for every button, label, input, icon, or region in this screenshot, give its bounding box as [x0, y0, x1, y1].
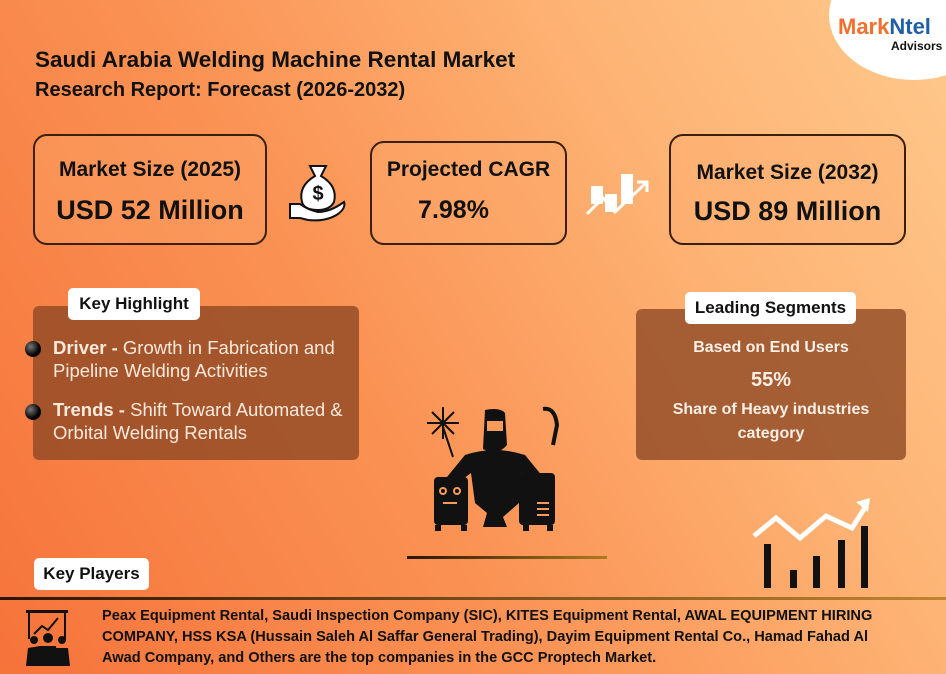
- tag: key highlight: [68, 288, 200, 320]
- icon: welder: [427, 406, 559, 531]
- panel: leading segments: [636, 309, 906, 460]
- icon: money bag: [289, 165, 346, 222]
- panel: leading segments: Based on End Users Share of Heavy industries: [673, 339, 869, 418]
- panel: key highlight: Trends - Shift Toward Automated & Orbital Welding Rentals: [53, 399, 343, 443]
- tag: key players: Key Players: [43, 564, 140, 583]
- panel: leading segments: category: [738, 425, 804, 442]
- panel: key highlight: [33, 306, 359, 460]
- box: CAGR: Projected CAGR: [387, 158, 550, 181]
- icon: money bag: $: [312, 183, 324, 205]
- box: market size 2025: USD 52 Million: [56, 195, 244, 225]
- box: market size 2032: Market Size (2032): [696, 161, 879, 184]
- box: market size 2032: USD 89 Million: [694, 196, 881, 226]
- logo: Advisors: [891, 39, 942, 53]
- icon: players: [26, 610, 70, 666]
- bullets: [25, 341, 41, 357]
- title: [35, 47, 515, 101]
- divider line: [0, 597, 946, 600]
- box: market size 2032: [669, 134, 906, 245]
- title: Saudi Arabia Welding Machine Rental Market: [35, 47, 515, 72]
- divider under welder: [407, 556, 607, 559]
- tag: leading segments: [685, 292, 856, 324]
- box: CAGR: [370, 141, 567, 245]
- box: market size 2025: Market Size (2025): [59, 158, 241, 181]
- tag: leading segments: Leading Segments: [695, 298, 846, 317]
- panel: leading segments: 55%: [751, 369, 791, 391]
- panel: key highlight: Driver - Growth in Fabrication and Pipeline Welding Activities: [53, 337, 335, 381]
- icon: growth: [586, 174, 648, 215]
- text: key players list: Peax Equipment Rental, Saudi Inspection Company (SIC), KITES Equipment Rental, AWAL EQUIPMENT HIRING COMPANY, HSS KSA (Hussain Saleh Al Saffar General Trading), Dayim Equipment Rental Co., Hamad Fahad Al Awad Company, and Others are the top companies in the GCC Proptech Market.: [102, 608, 872, 666]
- title: Research Report: Forecast (2026-2032): [35, 79, 405, 101]
- logo: MarkNtel: [838, 14, 931, 39]
- logo: [829, 0, 946, 80]
- tag: key highlight: Key Highlight: [79, 294, 189, 313]
- box: market size 2025: [33, 134, 267, 245]
- box: CAGR: 7.98%: [418, 196, 489, 224]
- tag: key players: [34, 558, 149, 590]
- icon: bar chart: [752, 498, 870, 588]
